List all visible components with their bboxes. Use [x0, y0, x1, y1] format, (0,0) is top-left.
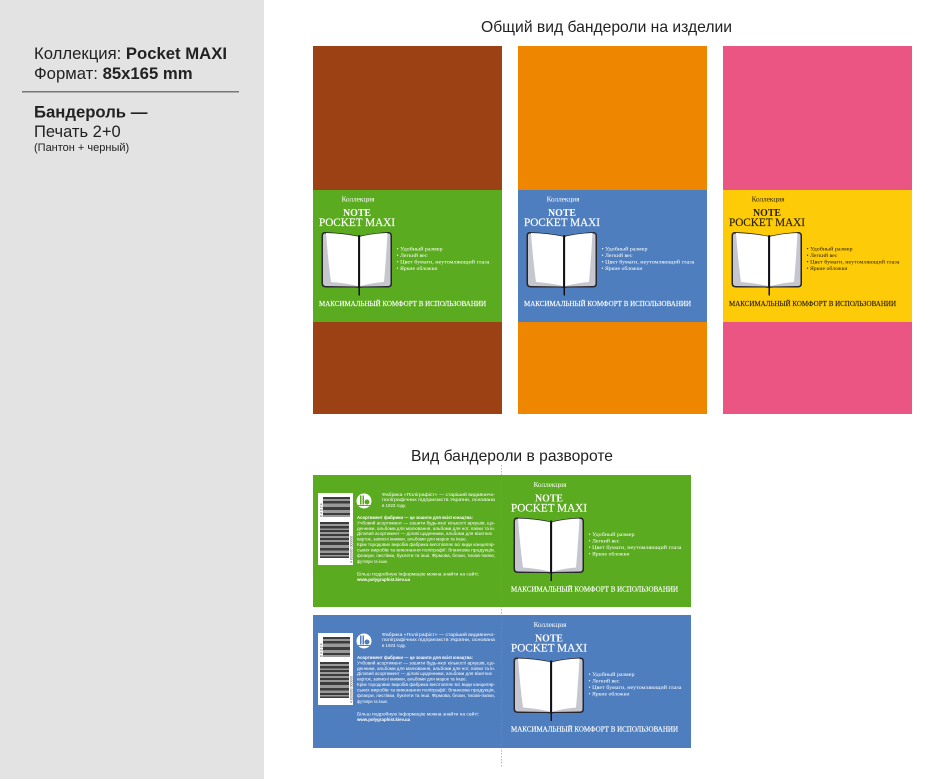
front band text: • Яркие обложки: [588, 690, 630, 698]
icon: open notebook: [526, 232, 597, 296]
back text: Фабрика «Поліграфіст» — старіший видавничо-: [382, 492, 496, 497]
band text: • Яркие обложки: [806, 265, 848, 272]
back text: в 1923 году.: [382, 643, 406, 648]
band text: NOTE: [753, 207, 781, 219]
band text: • Удобный размер: [396, 246, 443, 252]
print specification text: [34, 102, 148, 154]
back text: ських виробів та виконання поліграфії: бланкова продукція,: [357, 548, 495, 552]
panel: orange cover with blue band: [518, 46, 707, 414]
band text: МАКСИМАЛЬНЫЙ КОМФОРТ В ИСПОЛЬЗОВАНИИ: [319, 299, 486, 308]
icon: open notebook: [732, 232, 802, 296]
front band text: [511, 481, 682, 594]
front band text: • Яркие обложки: [588, 550, 630, 558]
front band text: • Цвет бумаги, неутомляющий глаза: [588, 684, 682, 691]
collection and format heading: Коллекция: Pocket MAXI: [34, 44, 227, 63]
band text: • Цвет бумаги, неутомляющий глаза: [602, 258, 695, 266]
back text: Учбовий асортимент — зошити будь-якої кількості аркушів, що-: [357, 520, 496, 526]
back text: карток, записні книжки, альбоми для марок та інше.: [357, 536, 467, 542]
print specification text: Печать 2+0: [34, 123, 121, 141]
band text: • Легкий вес: [396, 252, 428, 259]
barcode: [318, 493, 354, 565]
back text: футляри та інше.: [357, 699, 388, 704]
back text: www.polygraphist.kiev.ua: [356, 717, 411, 722]
front band text: • Цвет бумаги, неутомляющий глаза: [588, 544, 682, 551]
band text: POCKET MAXI: [524, 217, 600, 229]
back text: Крім тородових виробів фабрика виготовляє всі види канцеляр-: [357, 542, 496, 547]
band text: • Легкий вес: [806, 252, 838, 259]
band text: POCKET MAXI: [729, 217, 805, 229]
back text: [356, 632, 496, 722]
band text: Коллекция: [752, 196, 785, 204]
band text: • Яркие обложки: [396, 265, 438, 272]
back text: в 1923 году.: [382, 503, 406, 508]
band text: POCKET MAXI: [319, 217, 395, 229]
band text: [524, 196, 695, 308]
front band text: POCKET MAXI: [511, 642, 587, 654]
panel: green spread: [313, 475, 691, 607]
back text: Діловий асортимент — ділові щоденники, альбоми для візитних: [357, 671, 493, 676]
band text: Коллекция: [547, 196, 580, 204]
print specification text: Бандероль —: [34, 102, 148, 122]
back text: флаєри, листівки, буклети та інші. Фірмова, блоки, тисків-папки,: [357, 693, 495, 698]
icon: open notebook: [514, 518, 584, 581]
band text: NOTE: [343, 207, 371, 219]
band text: • Удобный размер: [806, 246, 853, 252]
front band text: NOTE: [535, 492, 563, 504]
front band text: POCKET MAXI: [511, 502, 587, 514]
back text: поліграфічних підприємств України, основана: [382, 637, 496, 642]
band text: МАКСИМАЛЬНЫЙ КОМФОРТ В ИСПОЛЬЗОВАНИИ: [524, 299, 691, 308]
back text: Фабрика «Поліграфіст» — старіший видавничо-: [382, 632, 496, 637]
front band text: Коллекция: [534, 481, 567, 489]
front band text: • Удобный размер: [588, 671, 635, 678]
back text: Більш подробную інформацію можна знайти на сайті:: [357, 572, 479, 576]
back text: денники, альбоми для малювання, альбоми для нот, папки та ін.: [357, 666, 495, 671]
panel: brown cover with green band: [313, 46, 502, 414]
front band text: Коллекция: [534, 621, 567, 629]
back text: поліграфічних підприємств України, основана: [382, 497, 496, 502]
print specification text: (Пантон + черный): [34, 142, 129, 154]
band text: [729, 196, 900, 308]
back text: www.polygraphist.kiev.ua: [356, 577, 411, 582]
back text: Діловий асортимент — ділові щоденники, альбоми для візитних: [357, 531, 493, 536]
band text: МАКСИМАЛЬНЫЙ КОМФОРТ В ИСПОЛЬЗОВАНИИ: [729, 299, 896, 308]
band text: • Цвет бумаги, неутомляющий глаза: [396, 258, 490, 266]
back text: Крім тородових виробів фабрика виготовляє всі види канцеляр-: [357, 682, 496, 687]
front band text: МАКСИМАЛЬНЫЙ КОМФОРТ В ИСПОЛЬЗОВАНИИ: [511, 584, 678, 594]
back text: футляри та інше.: [357, 559, 388, 564]
front band text: МАКСИМАЛЬНЫЙ КОМФОРТ В ИСПОЛЬЗОВАНИИ: [511, 724, 678, 734]
collection and format heading: [34, 44, 227, 83]
back text: Асортимент фабрики — це зошити для всієї юнацтва:: [357, 515, 474, 520]
band text: • Легкий вес: [602, 252, 633, 259]
band text: Коллекция: [342, 196, 375, 204]
front band text: NOTE: [535, 632, 563, 644]
band text: • Цвет бумаги, неутомляющий глаза: [806, 258, 900, 266]
icon: open notebook: [514, 658, 584, 721]
back text: ських виробів та виконання поліграфії: бланкова продукція,: [357, 688, 495, 692]
collection and format heading: Формат: 85x165 mm: [34, 64, 193, 83]
back text: Учбовий асортимент — зошити будь-якої кількості аркушів, що-: [357, 660, 496, 666]
logo: [356, 494, 372, 508]
back text: Асортимент фабрики — це зошити для всієї юнацтва:: [357, 655, 474, 660]
icon: open notebook: [322, 232, 392, 296]
heading: spread view: Вид бандероли в развороте: [411, 448, 613, 465]
band text: • Яркие обложки: [602, 265, 643, 272]
back text: денники, альбоми для малювання, альбоми для нот, папки та ін.: [357, 526, 495, 531]
band text: [319, 196, 490, 308]
barcode: [318, 633, 354, 705]
back text: карток, записні книжки, альбоми для марок та інше.: [357, 676, 467, 682]
panel: blue spread: [313, 615, 691, 748]
back text: [356, 492, 496, 582]
front band text: [511, 621, 682, 734]
band text: NOTE: [548, 207, 576, 219]
front band text: • Легкий вес: [588, 678, 620, 684]
back text: флаєри, листівки, буклети та інші. Фірмова, блоки, тисків-папки,: [357, 553, 495, 558]
front band text: • Удобный размер: [588, 531, 635, 538]
back text: Більш подробную інформацію можна знайти на сайті:: [357, 712, 479, 716]
sidebar panel: [0, 0, 264, 779]
panel: pink cover with yellow band: [723, 46, 912, 414]
heading: general view: Общий вид бандероли на изделии: [481, 19, 732, 36]
logo: [356, 634, 372, 648]
band text: • Удобный размер: [602, 246, 648, 252]
front band text: • Легкий вес: [588, 538, 620, 544]
